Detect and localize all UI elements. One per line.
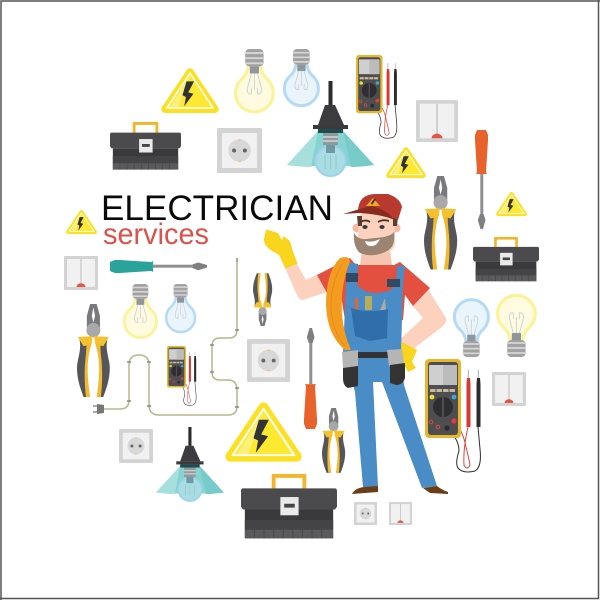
title: electrician: ELECTRICIAN [101,189,333,228]
icon: orange screwdriver lower [304,328,317,429]
icon: toolbox right [473,238,539,281]
icon: pliers left [77,304,110,397]
head [352,212,400,255]
icon: socket middle [247,339,290,382]
pocket tools [355,298,358,310]
icon: warning sign top [165,72,215,109]
belt [357,352,388,358]
icon: pliers top right [424,176,457,270]
rope [326,257,351,350]
legs [345,353,437,488]
icon: switch top [416,100,458,142]
icon: pliers small inverted [253,273,272,326]
neck [360,250,392,270]
right arm [397,286,446,350]
icon: yellow bulb lower [124,284,156,338]
right pouch [387,349,404,366]
icon: yellow bulb right [498,295,535,357]
icon: switch small [389,502,412,525]
wire with plug [93,258,239,415]
icon: multimeter lower [167,346,196,405]
icon: socket small [354,502,377,525]
icon: toolbox large [241,476,337,538]
icon: socket lower left [119,429,153,463]
icon: blue bulb lower [166,284,195,332]
icon: multimeter large [425,359,480,472]
left glove [265,231,296,267]
left pouch [342,350,358,368]
pocket [351,308,388,341]
shirt [317,258,430,320]
icon: socket top [217,128,262,173]
subtitle: services: services [103,218,209,251]
icon: warning sign far right [498,194,525,214]
bib and straps [343,262,405,353]
electrician character [265,194,448,494]
icon: yellow bulb top [236,49,273,112]
icon: switch left [64,256,98,290]
strap buckles [346,273,400,287]
icon: hanging lamp top [287,81,374,176]
icon: switch right [492,372,526,406]
icon: warning sign right [389,150,423,175]
icon: blue bulb top [284,49,318,106]
icon: pliers lower [322,408,345,473]
icon: teal screwdriver [110,260,207,273]
icon: multimeter top [356,55,397,138]
icon: blue bulb right [454,300,488,357]
left arm [285,264,327,300]
icon: warning sign large [230,407,297,457]
icon: hanging lamp lower [156,427,224,501]
cap [343,194,402,220]
right glove [398,342,417,372]
shoes [352,486,448,494]
icon: warning sign left [68,212,95,232]
icon: toolbox top left [110,123,181,170]
icon: orange screwdriver right [475,130,488,229]
